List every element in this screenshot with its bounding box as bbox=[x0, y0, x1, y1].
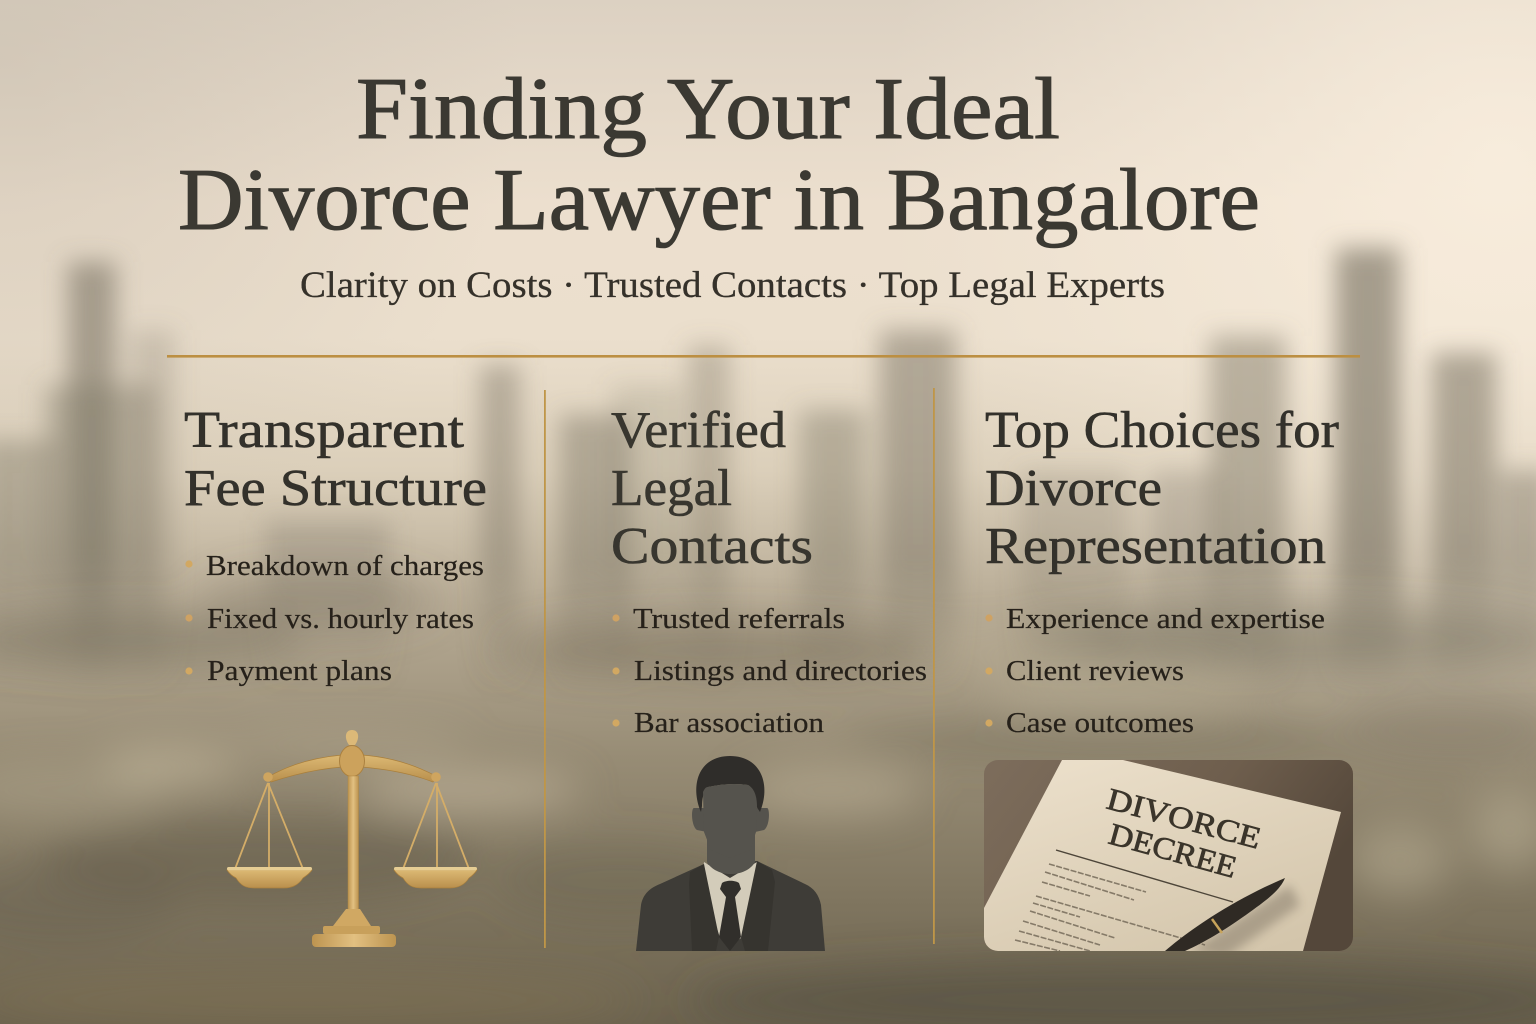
subtitle: Clarity on Costs · Trusted Contacts · Top Legal Experts bbox=[300, 265, 1165, 306]
bullet list: choice items: Client reviews bbox=[1006, 655, 1184, 687]
heading: verified legal contacts: Verified bbox=[611, 402, 786, 459]
title bbox=[178, 61, 1260, 249]
panel: top choices for divorce representation bbox=[984, 402, 1353, 958]
title: Finding Your Ideal bbox=[356, 61, 1060, 158]
heading: verified legal contacts: Legal bbox=[611, 460, 732, 517]
bullet list: fee items: Breakdown of charges bbox=[206, 550, 484, 582]
icon: scales of justice bbox=[227, 730, 477, 947]
bullet list: choice items: Case outcomes bbox=[1006, 707, 1194, 739]
bullet list: contact items: Trusted referrals bbox=[633, 603, 845, 635]
bullet list: fee items: Payment plans bbox=[207, 655, 392, 687]
decree heading: DIVORCE bbox=[1103, 781, 1265, 856]
heading: transparent fee structure: Fee Structure bbox=[184, 460, 487, 517]
bullet list: choice items: Experience and expertise bbox=[1006, 603, 1325, 635]
bullet list: contact items bbox=[612, 603, 927, 739]
image: divorce decree document with pen bbox=[984, 760, 1353, 958]
panel: verified legal contacts bbox=[611, 402, 927, 951]
divider: right column bbox=[933, 388, 935, 944]
heading: top choices: Divorce bbox=[985, 460, 1162, 517]
decree heading bbox=[1106, 788, 1260, 878]
bullet list: contact items: Bar association bbox=[634, 707, 825, 739]
title: Divorce Lawyer in Bangalore bbox=[178, 152, 1260, 249]
icon: lawyer silhouette bbox=[636, 756, 825, 951]
heading: transparent fee structure: Transparent bbox=[184, 402, 465, 459]
heading: top choices: Top Choices for bbox=[985, 402, 1339, 459]
divider: left column bbox=[544, 390, 546, 948]
bullet list: choice items bbox=[985, 603, 1325, 739]
heading: verified legal contacts: Contacts bbox=[611, 518, 813, 575]
bullet list: fee items: Fixed vs. hourly rates bbox=[207, 603, 474, 635]
heading: top choices: Representation bbox=[985, 518, 1326, 575]
decree heading: DECREE bbox=[1105, 816, 1241, 885]
bullet list: fee items bbox=[185, 550, 484, 687]
title divider rule bbox=[167, 355, 1360, 358]
panel: transparent fee structure bbox=[184, 402, 487, 947]
bullet list: contact items: Listings and directories bbox=[634, 655, 927, 687]
heading: verified legal contacts bbox=[611, 402, 813, 575]
heading: transparent fee structure bbox=[184, 402, 487, 517]
heading: top choices bbox=[985, 402, 1339, 575]
